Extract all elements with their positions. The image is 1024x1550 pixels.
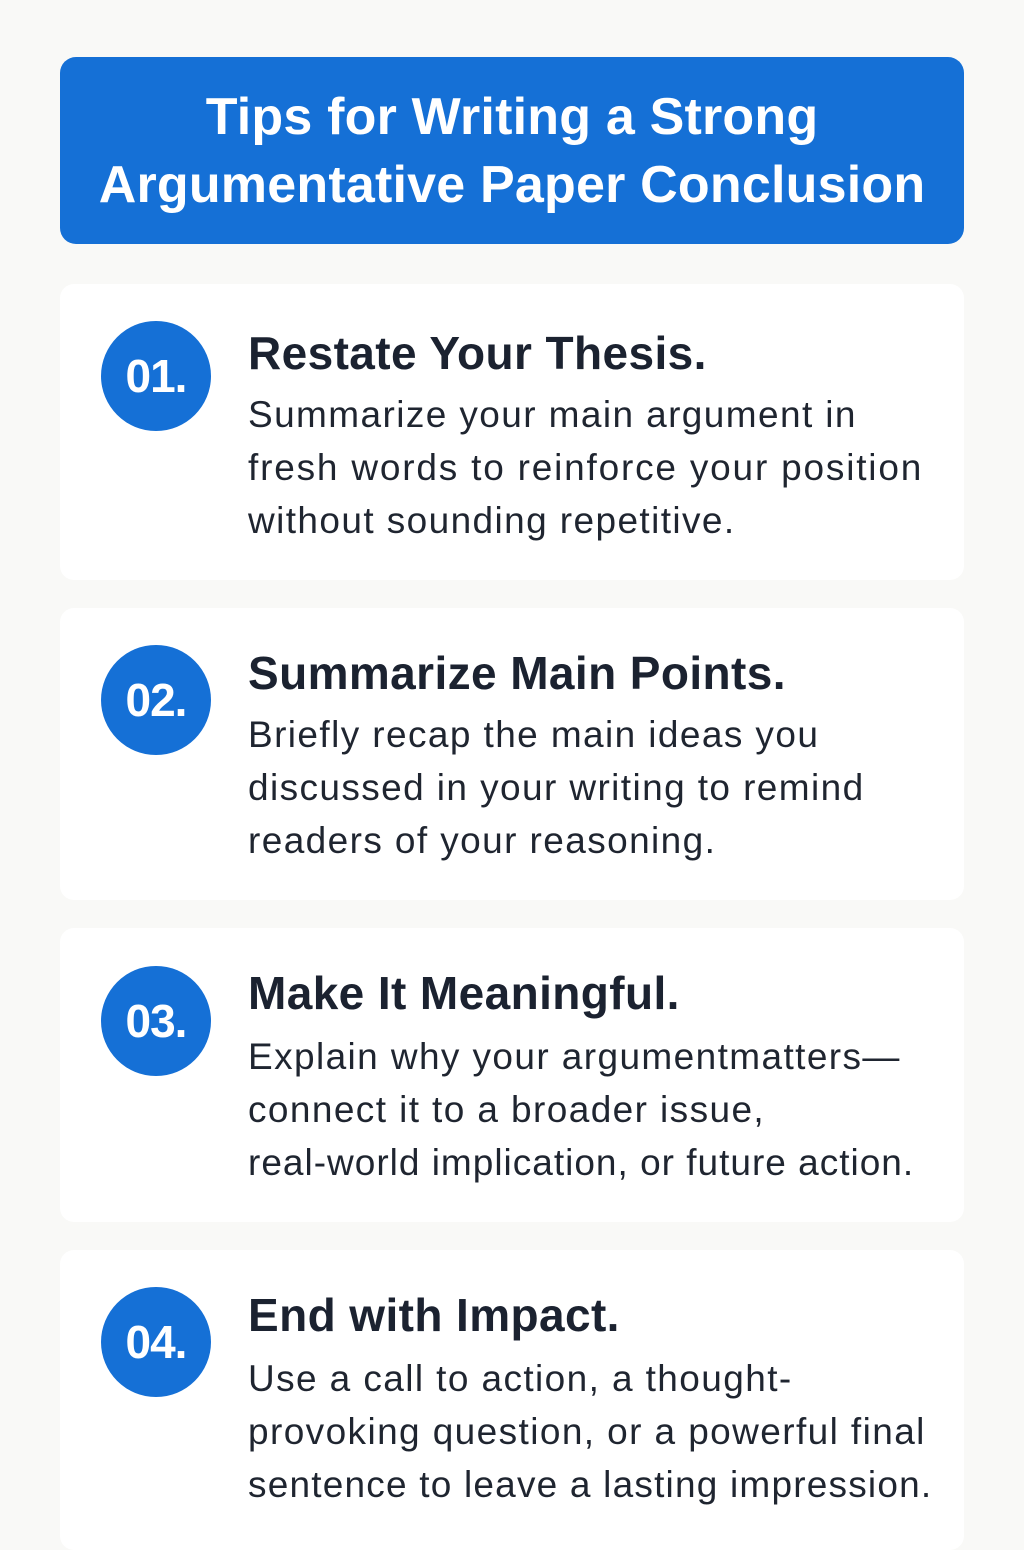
text: tip 3: connect it to a broader issue, — [248, 1089, 765, 1130]
text: tip 1: without sounding repetitive. — [248, 500, 736, 541]
text: tip 1: Summarize your main argument in — [248, 394, 857, 435]
text: tip 4 — [248, 1358, 932, 1505]
text: tip 2: readers of your reasoning. — [248, 820, 716, 861]
text: tip 2: Briefly recap the main ideas you — [248, 714, 819, 755]
panel: tip 3 — [60, 928, 964, 1222]
icon: number 02: 02. — [126, 674, 186, 726]
heading: tip 3: Make It Meaningful. — [248, 967, 680, 1019]
panel: tip 2 — [60, 608, 964, 900]
heading: tip 1: Restate Your Thesis. — [248, 327, 707, 379]
title: Tips for Writing a Strong — [206, 88, 818, 146]
panel: tip 4 — [60, 1250, 964, 1550]
icon: number 03 — [101, 966, 211, 1076]
text: tip 3: Explain why your argumentmatters— — [248, 1036, 901, 1077]
heading: tip 4: End with Impact. — [248, 1289, 620, 1341]
title: Argumentative Paper Conclusion — [99, 156, 925, 214]
text: tip 1: fresh words to reinforce your position — [248, 447, 923, 488]
title — [60, 57, 964, 244]
text: tip 3: real-world implication, or future action. — [248, 1142, 914, 1183]
icon: number 03: 03. — [126, 995, 186, 1047]
text: tip 2: discussed in your writing to remind — [248, 767, 865, 808]
text: tip 4: provoking question, or a powerful final — [248, 1411, 926, 1452]
heading: tip 2: Summarize Main Points. — [248, 647, 786, 699]
panel: tip 1 — [60, 284, 964, 580]
text: tip 4: sentence to leave a lasting impression. — [248, 1464, 932, 1505]
icon: number 04: 04. — [126, 1316, 186, 1368]
icon: number 04 — [101, 1287, 211, 1397]
icon: number 01: 01. — [126, 350, 186, 402]
text: tip 4: Use a call to action, a thought- — [248, 1358, 793, 1399]
icon: number 01 — [101, 321, 211, 431]
text: tip 3 — [248, 1036, 914, 1183]
text: tip 2 — [248, 714, 865, 861]
text: tip 1 — [248, 394, 923, 541]
icon: number 02 — [101, 645, 211, 755]
